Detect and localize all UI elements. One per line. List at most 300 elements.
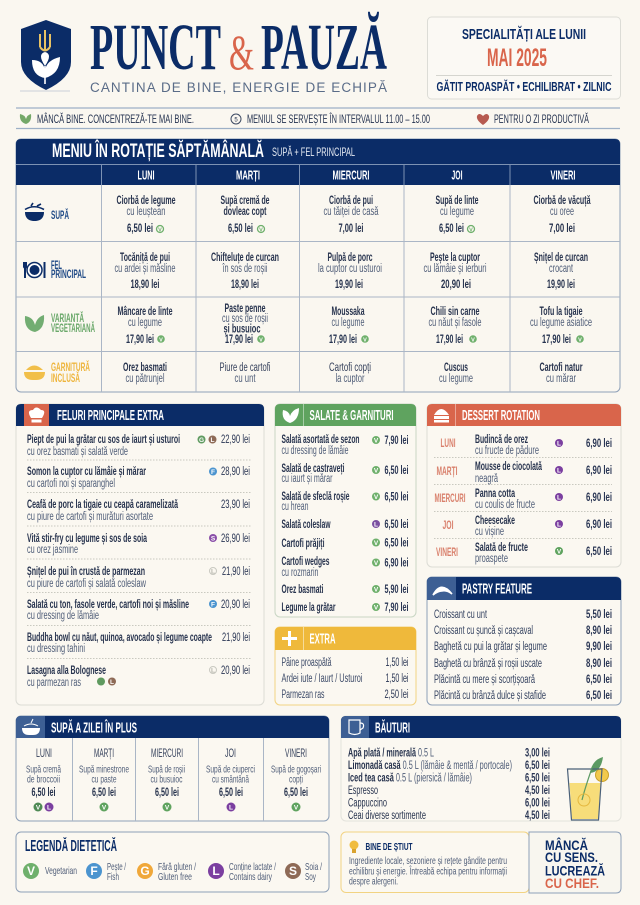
row: included side: cu unt xyxy=(234,373,256,385)
salad list: V xyxy=(374,437,379,444)
row: main course: PRINCIPAL xyxy=(51,269,86,281)
dessert monday: LUNI xyxy=(440,438,456,450)
item: pork neck: 23,90 lei xyxy=(221,499,250,511)
salad list: V xyxy=(374,560,379,567)
item: grilled chicken: 22,90 lei xyxy=(221,434,250,446)
dessert friday: V xyxy=(557,548,562,555)
soup tuesday: V xyxy=(102,804,107,811)
panel: drinks xyxy=(341,716,621,822)
salad list: V xyxy=(374,494,379,501)
extras list: 2,50 lei xyxy=(384,689,408,701)
pastry list: 5,50 lei xyxy=(586,609,612,621)
pastry list: 6,50 lei xyxy=(586,674,612,686)
soup thursday: cu smântână xyxy=(212,774,249,786)
panel: good to know xyxy=(341,832,529,892)
soup friday: 6,50 lei xyxy=(284,787,308,799)
row: main course xyxy=(24,252,588,291)
legend: dairy: L xyxy=(212,864,220,878)
soup tuesday: Supă minestrone xyxy=(79,764,129,776)
legend: gluten free: G xyxy=(140,864,150,878)
salad list: Salată coleslaw xyxy=(282,519,331,531)
callout: monthly specials xyxy=(428,17,620,99)
row: vegetarian option xyxy=(25,303,592,346)
icon: lemonade glass xyxy=(568,757,608,820)
dessert thursday xyxy=(442,515,612,538)
item: schnitzel: cu piure de cartofi și salată coleslaw xyxy=(27,578,146,590)
dessert wednesday: MIERCURI xyxy=(434,493,466,505)
callout: slogan: LUCREAZĂ xyxy=(545,862,605,878)
soup monday: 6,50 lei xyxy=(32,787,56,799)
pastry list: 8,90 lei xyxy=(586,658,612,670)
drinks list: 6,50 lei xyxy=(525,772,550,784)
extras list: 1,50 lei xyxy=(386,673,408,685)
dessert wednesday: cu coulis de fructe xyxy=(475,499,535,511)
row: soup: Ciorbă de văcuță xyxy=(534,195,591,207)
row: vegetarian option: 17,90 lei xyxy=(329,334,357,346)
extras list: 1,50 lei xyxy=(386,657,408,669)
drinks list: 3,00 lei xyxy=(525,748,550,760)
dessert friday: proaspete xyxy=(475,553,508,565)
item: buddha bowl xyxy=(27,632,250,655)
soup thursday: L xyxy=(229,804,233,811)
row: soup: 6,50 lei xyxy=(228,223,253,235)
item: pork neck xyxy=(27,499,250,523)
drinks list: 4,50 lei xyxy=(525,785,550,797)
item: tuna salad: Salată cu ton, fasole verde, cartofi noi și măsline xyxy=(27,599,189,611)
extras list: Ardei iute / Iaurt / Usturoi xyxy=(282,673,362,685)
icon: plus xyxy=(282,631,297,646)
soup thursday: 6,50 lei xyxy=(219,787,243,799)
pastry list: Baghetă cu brânză și roșii uscate xyxy=(434,658,542,670)
icon: cup xyxy=(349,720,364,734)
drinks list: Limonadă casă 0.5 L (lămâie & mentă / portocale) xyxy=(348,760,512,772)
item: salmon: Somon la cuptor cu lămâie și mărar xyxy=(27,466,146,478)
text block xyxy=(349,856,507,888)
row: included side: cu legume xyxy=(439,373,473,385)
soup tuesday: 6,50 lei xyxy=(92,787,116,799)
drinks list: Iced tea casă 0.5 L (piersică / lămâie) xyxy=(348,772,472,784)
row: included side: Cartofi copți xyxy=(329,362,371,374)
dessert monday: 6,90 lei xyxy=(586,438,612,450)
row: main course: FEL xyxy=(51,260,62,272)
row: vegetarian option: cu legume xyxy=(128,317,162,329)
dessert thursday: 6,90 lei xyxy=(586,519,612,531)
soup monday: L xyxy=(47,804,51,811)
item: beef stir-fry: 26,90 lei xyxy=(221,533,250,545)
day header row: JOI xyxy=(452,168,462,182)
icon: heart xyxy=(477,114,489,125)
row: soup: Ciorbă de pui xyxy=(329,195,373,207)
item: grilled chicken: cu orez basmati și salată verde xyxy=(27,446,128,458)
soup thursday xyxy=(206,748,255,812)
item: pork neck: cu piure de cartofi și murături asortate xyxy=(27,511,153,523)
salad list: 6,50 lei xyxy=(384,519,408,531)
legend: soy: Soia / xyxy=(305,861,322,873)
extras list: Pâine proaspătă xyxy=(282,657,332,669)
row: main course: 19,90 lei xyxy=(547,279,575,291)
pastry list: Plăcintă cu mere și scorțișoară xyxy=(434,674,535,686)
salad list: 7,90 lei xyxy=(384,435,408,447)
soup tuesday xyxy=(79,748,129,812)
icon: croissant xyxy=(433,587,452,595)
dessert thursday: cu vișine xyxy=(475,526,504,538)
row: main course: Pulpă de porc xyxy=(328,252,373,264)
row: main course: Tocăniță de pui xyxy=(120,252,170,264)
panel: extra main courses: FELURI PRINCIPALE EXTRA xyxy=(57,407,164,424)
drinks list: Espresso xyxy=(348,785,378,797)
salad list: V xyxy=(374,604,379,611)
soup friday: VINERI xyxy=(285,748,307,760)
panel: dietary legend xyxy=(16,832,329,892)
row: vegetarian option: cu legume xyxy=(332,317,364,329)
row: soup: V xyxy=(158,227,162,233)
salad list: Salată asortată de sezon xyxy=(282,434,360,446)
panel: weekly rotation menu table xyxy=(16,139,620,392)
row: included side: cu mărar xyxy=(546,373,576,385)
row: main course: 18,90 lei xyxy=(130,279,160,291)
salad list: V xyxy=(374,540,379,547)
dessert monday: cu fructe de pădure xyxy=(475,445,539,457)
table title: MENIU ÎN ROTAȚIE SĂPTĂMÂNALĂ xyxy=(52,140,264,162)
legend: soy: Soy xyxy=(305,871,316,883)
row: soup: cu tăiței de casă xyxy=(324,206,379,218)
soup friday: V xyxy=(294,804,299,811)
item: beef stir-fry: S xyxy=(211,535,216,542)
row: soup: V xyxy=(469,227,473,233)
panel: drinks: BĂUTURI xyxy=(375,720,410,736)
legend: fish xyxy=(86,861,126,883)
salad list: Orez basmati xyxy=(282,584,324,596)
row: main course: 19,90 lei xyxy=(335,279,363,291)
item: lasagna xyxy=(27,665,250,689)
dessert wednesday: Panna cotta xyxy=(475,488,515,500)
legend: soy xyxy=(285,861,322,883)
item: buddha bowl: 21,90 lei xyxy=(222,632,250,644)
dessert monday: Budincă de orez xyxy=(475,434,528,446)
dessert friday: 6,50 lei xyxy=(586,546,612,558)
item: lasagna: L xyxy=(110,679,114,686)
row: vegetarian option: cu năut și fasole xyxy=(428,317,482,329)
row: main course: 18,90 lei xyxy=(231,279,259,291)
row: soup: cu leuștean xyxy=(126,206,166,218)
day header row: LUNI xyxy=(138,168,154,182)
row: included side: Piure de cartofi xyxy=(220,362,270,374)
salad list: L xyxy=(374,521,378,528)
dessert tuesday: 6,90 lei xyxy=(586,465,612,477)
soup wednesday: Supă de roșii xyxy=(148,764,185,776)
panel: soup of the day xyxy=(16,716,329,821)
salad list: Salată de castraveți xyxy=(282,463,344,475)
legend: fish: Pește / xyxy=(107,861,126,873)
item: tuna salad: cu dressing de lămâie xyxy=(27,610,99,622)
item: grilled chicken: L xyxy=(211,437,215,444)
salad list: 7,90 lei xyxy=(384,602,408,614)
dessert thursday: JOI xyxy=(442,520,454,532)
item: buddha bowl: cu dressing tahini xyxy=(27,643,85,655)
title: Punct & Pauză: PUNCT xyxy=(90,11,221,84)
row: included side: Orez basmati xyxy=(123,362,167,374)
dessert wednesday xyxy=(434,488,612,511)
item: salmon: F xyxy=(211,469,215,476)
text block: echilibru și energie. Întreabă echipa pentru informații xyxy=(349,864,507,878)
soup wednesday: V xyxy=(165,804,170,811)
row: soup: cu oree xyxy=(550,206,574,218)
soup tuesday: MARȚI xyxy=(94,748,114,760)
soup thursday: Supă de ciuperci xyxy=(206,764,255,776)
soup monday xyxy=(26,748,61,812)
soup wednesday xyxy=(148,748,185,812)
extras list: Parmezan ras xyxy=(282,689,325,701)
item: beef stir-fry: cu orez jasmine xyxy=(27,544,78,556)
dessert tuesday: Mousse de ciocolată xyxy=(475,461,542,473)
row: included side: INCLUSĂ xyxy=(51,372,80,385)
callout: slogan: CU SENS. xyxy=(545,849,598,865)
legend: fish: F xyxy=(90,864,98,878)
legend: fish: Fish xyxy=(107,871,119,883)
tagline: CANTINA DE BINE, ENERGIE DE ECHIPĂ xyxy=(90,80,387,95)
panel: extras xyxy=(275,627,416,705)
salad list: Salată de sfeclă roșie xyxy=(282,491,350,503)
salad list: Legume la grătar xyxy=(282,602,336,614)
row: main course: în sos de roșii xyxy=(222,263,268,275)
item: schnitzel: Șnițel de pui în crustă de parmezan xyxy=(27,566,145,578)
legend: dairy xyxy=(208,861,276,883)
row: vegetarian option: V xyxy=(259,337,263,343)
soup wednesday: MIERCURI xyxy=(151,748,183,760)
panel: dessert rotation xyxy=(427,404,621,567)
item: lasagna: Lasagna alla Bolognese xyxy=(27,665,106,677)
legend: vegetarian xyxy=(23,863,77,879)
row: soup: V xyxy=(259,227,263,233)
icon: plate and cutlery xyxy=(24,262,44,278)
row: vegetarian option: Chili sin carne xyxy=(430,306,480,318)
legend: vegetarian: V xyxy=(27,864,35,878)
icon: white bowl xyxy=(22,719,40,735)
drinks list xyxy=(348,748,550,822)
drinks list: 4,50 lei xyxy=(525,810,550,822)
row: vegetarian option: Tofu la tigaie xyxy=(540,306,582,318)
dessert tuesday: neagră xyxy=(475,473,498,485)
row: vegetarian option: 17,90 lei xyxy=(436,334,463,346)
row: vegetarian option: cu sos de roșii xyxy=(222,313,268,325)
pastry list: 8,90 lei xyxy=(586,625,612,637)
salad list: 6,50 lei xyxy=(384,465,408,477)
callout: slogan xyxy=(529,832,621,893)
row: soup: Ciorbă de legume xyxy=(116,195,176,207)
item: tuna salad xyxy=(27,599,250,622)
row: soup: dovleac copt xyxy=(224,206,267,218)
pastry list: 6,50 lei xyxy=(586,690,612,702)
item: buddha bowl: Buddha bowl cu năut, quinoa, avocado și legume coapte xyxy=(27,632,212,644)
icon: cake xyxy=(434,409,449,422)
row: soup xyxy=(25,195,591,235)
legend: gluten free: Gluten free xyxy=(158,871,192,883)
row: included side: Cartofi natur xyxy=(540,362,583,374)
dessert friday: Salată de fructe xyxy=(475,542,528,554)
item: grilled chicken: Piept de pui la grătar cu sos de iaurt și usturoi xyxy=(27,434,180,446)
row: soup: Supă de linte xyxy=(436,195,478,207)
callout: slogan: MÂNCĂ xyxy=(545,836,588,853)
icon: light bulb xyxy=(350,840,358,853)
dessert thursday: Cheesecake xyxy=(475,515,515,527)
row: soup: cu legume xyxy=(440,206,474,218)
item: tuna salad: F xyxy=(211,601,215,608)
salad list: Cartofi wedges xyxy=(282,556,330,568)
salad list xyxy=(282,434,408,614)
row: vegetarian option: V xyxy=(159,337,163,343)
day header row xyxy=(138,168,576,182)
row: vegetarian option: 17,90 lei xyxy=(542,334,571,346)
soup monday: LUNI xyxy=(36,748,52,760)
drinks list: 6,00 lei xyxy=(525,798,550,810)
icon: leaves xyxy=(20,114,31,124)
title: Punct & Pauză: PAUZĂ xyxy=(261,11,387,84)
row: main course: 20,90 lei xyxy=(441,279,471,291)
row: vegetarian option: V xyxy=(578,337,582,343)
dessert tuesday: L xyxy=(557,467,561,474)
callout: monthly specials: SPECIALITĂȚI ALE LUNII xyxy=(462,26,586,43)
day header row: VINERI xyxy=(550,168,576,182)
legend: vegetarian: Vegetarian xyxy=(45,865,77,877)
row: vegetarian option: V xyxy=(471,337,475,343)
item: schnitzel: 21,90 lei xyxy=(222,566,250,578)
row: soup: SUPĂ xyxy=(51,209,69,222)
dessert thursday: L xyxy=(557,521,561,528)
day header row: MARȚI xyxy=(236,168,260,182)
legend: soy: S xyxy=(289,864,297,878)
row: vegetarian option: 17,90 lei xyxy=(126,334,154,346)
drinks list: Cappuccino xyxy=(348,798,387,810)
panel: dessert rotation: DESSERT ROTATION xyxy=(462,407,540,424)
dessert tuesday: MARȚI xyxy=(436,466,458,478)
salad list: 5,90 lei xyxy=(384,584,408,596)
soup friday: Supă de gogoșari xyxy=(271,764,321,776)
row: vegetarian option: 17,90 lei xyxy=(225,334,253,346)
legend: dairy: Contains dairy xyxy=(229,871,272,883)
panel: extra main courses xyxy=(16,404,264,705)
pastry list: Plăcintă cu brânză dulce și stafide xyxy=(434,690,546,702)
row: main course: Pește la cuptor xyxy=(430,252,480,264)
item: lasagna: 20,90 lei xyxy=(221,665,250,677)
soup thursday: JOI xyxy=(225,748,236,760)
row: soup: 7,00 lei xyxy=(549,223,575,235)
soup wednesday: 6,50 lei xyxy=(155,787,179,799)
item: schnitzel: L xyxy=(211,568,215,575)
info strip: MENIUL SE SERVEȘTE ÎN INTERVALUL 11.00 – 15.00 xyxy=(247,113,430,126)
day header row: MIERCURI xyxy=(332,168,370,182)
row: included side: GARNITURĂ xyxy=(51,361,90,374)
extras list xyxy=(282,657,408,701)
item: beef stir-fry xyxy=(27,533,250,556)
row: main course: la cuptor cu usturoi xyxy=(318,263,382,275)
icon: green leaves xyxy=(25,315,44,332)
panel: pastry feature: PASTRY FEATURE xyxy=(462,580,532,598)
salad list: cu hrean xyxy=(282,501,308,513)
dessert monday xyxy=(440,434,612,457)
soup monday: Supă cremă xyxy=(26,764,61,776)
item: salmon: cu cartofi noi și sparanghel xyxy=(27,478,115,490)
row: included side: cu pătrunjel xyxy=(126,373,164,385)
item: lasagna: cu parmezan ras xyxy=(27,677,81,689)
dessert tuesday xyxy=(436,461,612,485)
row: vegetarian option: și busuioc xyxy=(224,324,261,336)
row: vegetarian option: VEGETARIANĂ xyxy=(51,322,95,335)
dessert wednesday: 6,90 lei xyxy=(586,492,612,504)
table subtitle: SUPĂ + FEL PRINCIPAL xyxy=(272,146,355,159)
row: main course: cu ardei și măsline xyxy=(114,263,176,275)
info strip: MÂNCĂ BINE. CONCENTREZĂ-TE MAI BINE. xyxy=(37,113,194,126)
salad list: cu iaurt și mărar xyxy=(282,473,333,485)
row: soup: 6,50 lei xyxy=(127,223,153,235)
soup tuesday: cu paste xyxy=(92,774,117,786)
legend: gluten free xyxy=(137,861,196,883)
soup monday: de broccoii xyxy=(27,774,60,786)
panel: salads and sides xyxy=(275,404,416,617)
salad list: V xyxy=(374,467,379,474)
text block: despre alergeni. xyxy=(349,876,398,888)
item: grilled chicken xyxy=(27,434,250,458)
callout: monthly specials: MAI 2025 xyxy=(487,44,547,72)
dessert friday xyxy=(436,542,612,565)
drinks list: 6,50 lei xyxy=(525,760,550,772)
callout: slogan: CU CHEF. xyxy=(545,875,599,891)
pastry list: Croissant cu unt xyxy=(434,609,488,621)
row: soup: Supă cremă de xyxy=(220,195,270,207)
icon: white leaf xyxy=(283,408,299,423)
info strip xyxy=(16,108,620,128)
salad list: 6,50 lei xyxy=(384,538,408,550)
icon: soup bowl xyxy=(25,203,44,221)
item: tuna salad: 20,90 lei xyxy=(221,599,250,611)
item: pork neck: Ceafă de porc la tigaie cu ceapă caramelizată xyxy=(27,499,178,511)
row: vegetarian option: cu legume asiatice xyxy=(530,317,592,329)
item: grilled chicken: G xyxy=(199,437,204,444)
row: soup: 6,50 lei xyxy=(439,223,464,235)
row: soup: 7,00 lei xyxy=(338,223,364,235)
row: included side: la cuptor xyxy=(336,373,365,385)
icon: clock xyxy=(231,114,241,124)
panel: dietary legend: LEGENDĂ DIETETICĂ xyxy=(25,838,117,855)
panel: pastry feature xyxy=(427,577,621,705)
item: salmon xyxy=(27,466,250,490)
salad list: V xyxy=(374,586,379,593)
dessert friday: VINERI xyxy=(436,547,458,559)
salad list: cu dressing de lămâie xyxy=(282,445,348,457)
soup friday xyxy=(271,748,321,812)
row: main course: cu lămâie și ierburi xyxy=(424,263,486,275)
salad list: Cartofi prăjiți xyxy=(282,538,324,550)
row: vegetarian option: Mâncare de linte xyxy=(118,306,172,318)
row: main course: Șnițel de curcan xyxy=(534,252,588,264)
item: schnitzel xyxy=(27,566,250,590)
icon: clock: 5 xyxy=(234,118,238,124)
legend: gluten free: Fără gluten / xyxy=(158,861,196,873)
icon: yellow bowl xyxy=(24,366,45,380)
row: main course: crocant xyxy=(549,263,574,275)
salad list: 6,50 lei xyxy=(384,492,408,504)
drinks list: Ceai diverse sortimente xyxy=(348,810,426,822)
row: included side: Cuscus xyxy=(444,362,468,374)
row: vegetarian option: V xyxy=(363,337,367,343)
drinks list: Apă plată / minerală 0.5 L xyxy=(348,748,434,760)
soup wednesday: cu busuioc xyxy=(150,774,182,786)
pastry list: Baghetă cu pui la grătar și legume xyxy=(434,641,547,653)
panel: good to know: BINE DE ȘTIUT xyxy=(366,841,413,853)
salad list: 6,90 lei xyxy=(384,558,408,570)
soup monday: V xyxy=(36,804,41,811)
panel: extras: EXTRA xyxy=(310,630,336,648)
panel: salads and sides: SALATE & GARNITURI xyxy=(310,407,394,424)
